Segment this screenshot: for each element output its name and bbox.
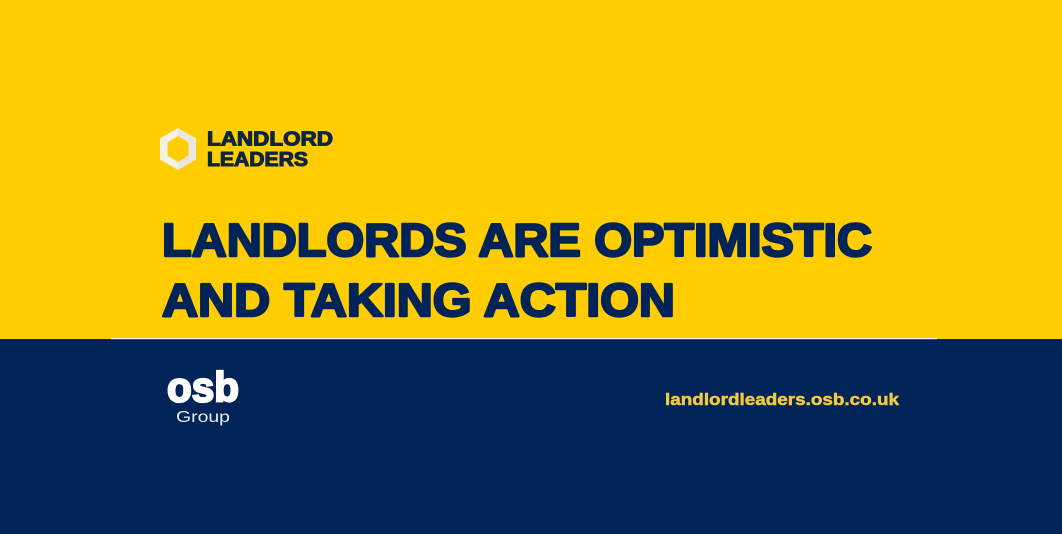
logo wordmark: LANDLORD	[207, 128, 333, 150]
osb wordmark: osb	[167, 364, 239, 410]
group label: Group	[176, 409, 230, 426]
panel: yellow top band	[0, 0, 1062, 339]
logo: Landlord Leaders	[160, 128, 333, 171]
title: AND TAKING ACTION	[162, 274, 675, 326]
logo: OSB Group	[167, 364, 239, 426]
title	[162, 214, 872, 326]
panel: navy bottom band	[0, 339, 1062, 534]
icon: hexagon	[160, 128, 196, 170]
website url: landlordleaders.osb.co.uk	[665, 390, 900, 409]
title: LANDLORDS ARE OPTIMISTIC	[162, 214, 872, 266]
white divider line	[111, 338, 937, 339]
logo wordmark	[207, 128, 333, 171]
logo wordmark: LEADERS	[207, 149, 308, 171]
